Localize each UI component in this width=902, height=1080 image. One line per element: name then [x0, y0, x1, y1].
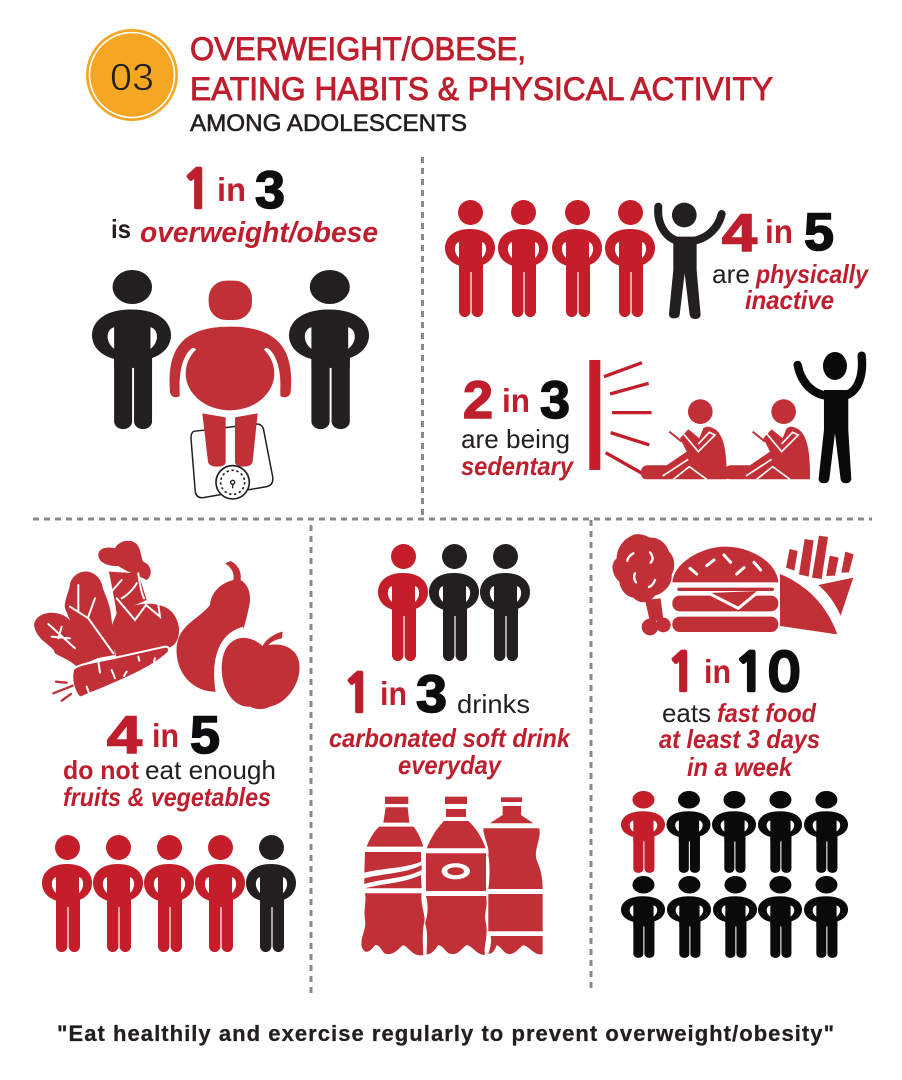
stat: 1 in 3 overweight: overweight/obese — [140, 217, 378, 249]
stat: 2 in 3 sedentary: sedentary — [461, 451, 574, 481]
icon part: right bottle — [483, 797, 543, 954]
stat: 4 in 5 physically inactive: inactive — [745, 285, 834, 315]
icon part: left bottle — [361, 797, 425, 955]
stat: 2 in 3 sedentary: are being — [461, 424, 570, 454]
icon part: chicken drumstick — [613, 534, 674, 635]
stat: 4 in 5 physically inactive: physically — [755, 259, 869, 289]
stat: 2 in 3 sedentary: 3 — [540, 371, 570, 430]
stat: 2 in 3 sedentary: 2 — [463, 371, 493, 430]
stat: 1 in 10 fast food: in a week — [687, 752, 793, 782]
icon: soft drink bottles — [361, 797, 543, 955]
stat: 1 in 3 soft drink: carbonated soft drink — [329, 723, 571, 753]
stat: 1 in 10 fast food: at least 3 days — [659, 724, 820, 754]
stat: 1 in 3 overweight: 1 — [181, 163, 213, 216]
stat: 1 in 10 fast food: fast food — [717, 698, 817, 728]
stat: 4 in 5 physically inactive: in — [765, 213, 793, 250]
stat: 4 in 5 fruits and vegetables — [63, 706, 276, 812]
stat: 1 in 3 soft drink: 1 — [342, 667, 374, 720]
icon: four red people and one active black person — [445, 200, 722, 319]
icon: fruits and vegetables — [34, 541, 250, 701]
title: OVERWEIGHT/OBESE, — [190, 31, 526, 67]
number badge — [86, 29, 178, 121]
stat: 4 in 5 fruits and vegetables: fruits & vegetables — [63, 782, 271, 812]
number badge: 03 — [110, 57, 154, 99]
icon part: pear — [177, 561, 250, 692]
stat: 1 in 3 soft drink: everyday — [398, 750, 502, 780]
stat: 4 in 5 fruits and vegetables: eat enough — [145, 755, 276, 785]
stat: 2 in 3 sedentary: in — [502, 382, 530, 419]
icon: four of five people — [42, 835, 296, 952]
icon part: french fries — [780, 536, 854, 634]
icon part: apple halo and apple — [217, 630, 300, 709]
stat: 1 in 3 overweight — [111, 161, 378, 249]
stat: 1 in 3 soft drink — [329, 665, 571, 780]
stat: 1 in 10 fast food: 1 — [666, 646, 698, 699]
stat: 4 in 5 physically inactive: 5 — [804, 203, 834, 262]
icon: people sitting on devices before a screen — [589, 352, 862, 483]
icon part: middle bottle — [425, 797, 487, 955]
stat: 4 in 5 fruits and vegetables: 4 — [107, 706, 143, 765]
stat: 1 in 10 fast food — [659, 646, 820, 782]
title — [190, 31, 773, 137]
stat: 1 in 3 soft drink: 3 — [416, 665, 447, 724]
stat: 2 in 3 sedentary — [461, 371, 574, 481]
stat: 1 in 10 fast food: eats — [662, 698, 711, 728]
icon part: herbs and leaves — [65, 571, 115, 660]
stat: 4 in 5 physically inactive — [712, 203, 869, 315]
icon part: carrot — [72, 647, 169, 698]
stat: 4 in 5 fruits and vegetables: 5 — [190, 706, 220, 765]
stat: 4 in 5 fruits and vegetables: do not — [63, 755, 139, 785]
icon: three people with obese figure on scale — [92, 270, 369, 499]
stat: 1 in 3 overweight: 3 — [255, 161, 285, 220]
stat: 1 in 3 soft drink: in — [380, 675, 407, 712]
stat: 1 in 3 soft drink: drinks — [457, 689, 530, 719]
icon part: tomato — [110, 604, 179, 658]
icon: fast food — [613, 534, 854, 635]
stat: 4 in 5 physically inactive: are — [712, 259, 750, 289]
icon: one of ten people — [621, 791, 848, 958]
title: EATING HABITS & PHYSICAL ACTIVITY — [190, 71, 773, 107]
stat: 4 in 5 physically inactive: 4 — [722, 204, 758, 263]
icon: one of three people — [378, 544, 530, 661]
stat: 1 in 3 overweight: in — [217, 171, 246, 208]
stat: 1 in 10 fast food: in — [704, 653, 731, 690]
title: AMONG ADOLESCENTS — [190, 110, 467, 137]
stat: 4 in 5 fruits and vegetables: in — [152, 717, 179, 754]
stat: 1 in 10 fast food: 10 — [733, 646, 801, 699]
footer message: "Eat healthily and exercise regularly to prevent overweight/obesity" — [57, 1021, 834, 1046]
icon part: burger — [672, 547, 778, 632]
stat: 1 in 3 overweight: is — [111, 214, 131, 244]
